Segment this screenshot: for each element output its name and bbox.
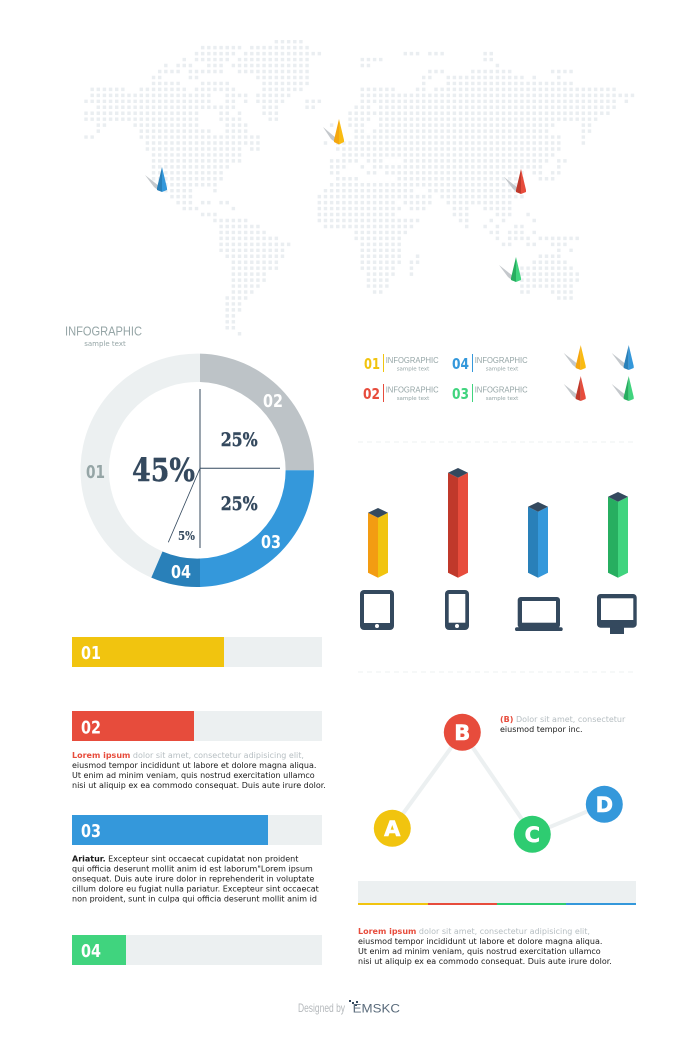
connecting lines — [392, 732, 604, 834]
3D bar: yellow — [368, 508, 388, 578]
legend item 04: sample text — [486, 367, 519, 373]
node A — [374, 810, 411, 847]
segment numbers: 01 — [86, 462, 105, 483]
legend item 04: INFOGRAPHIC — [475, 355, 528, 365]
donut heading — [65, 324, 142, 348]
icon: tablet — [360, 590, 394, 630]
legend item 01: 01 — [364, 355, 380, 373]
3D bar: blue — [528, 502, 548, 578]
percent labels — [132, 429, 258, 543]
dividing lines — [168, 389, 280, 548]
network diagram — [374, 714, 623, 853]
legend item 02: sample text — [397, 396, 430, 402]
legend item 01: INFOGRAPHIC — [386, 355, 439, 365]
legend item 04 — [452, 354, 528, 373]
segment numbers: 03 — [261, 532, 281, 553]
text block: ariatur: Excepteur sint occaecat cupidatat non proident — [106, 855, 298, 864]
map pin: red — [504, 169, 526, 194]
node C: C — [525, 823, 540, 847]
segment 01 — [80, 354, 200, 578]
legend item 02: INFOGRAPHIC — [386, 385, 439, 395]
node D — [586, 786, 623, 823]
text block: lorem ipsum: eiusmod tempor incididunt ut labore et dolore magna aliqua. — [72, 761, 316, 770]
3D bar: green — [608, 492, 628, 578]
text block: ariatur: non proident, sunt in culpa qui officia deserunt mollit anim id — [72, 895, 317, 904]
legend item 03: sample text — [486, 396, 519, 402]
footer credit — [298, 1000, 400, 1016]
text block: lorem ipsum: nisi ut aliquip ex ea commodo consequat. Duis aute irure dolor. — [72, 781, 326, 790]
percent labels: 5% — [178, 529, 196, 543]
progress bar 01: 01 — [81, 643, 101, 664]
node B — [444, 714, 481, 751]
segment 03 — [200, 470, 314, 587]
callout: B: (B) — [500, 715, 513, 724]
text block: ariatur: onsequat. Duis aute irure dolor in reprehenderit in voluptate — [72, 875, 314, 884]
segment numbers — [86, 391, 283, 583]
text block: ariatur: Ariatur. — [72, 855, 106, 864]
footer credit: Designed by — [298, 1001, 345, 1015]
legend item 02: 02 — [363, 385, 380, 403]
progress bar 03 — [72, 815, 322, 845]
legend item 03: INFOGRAPHIC — [475, 385, 528, 395]
icon: phone — [445, 590, 469, 630]
progress bar 04: 04 — [81, 941, 101, 962]
segment numbers: 04 — [171, 562, 191, 583]
legend pin: yellow — [564, 345, 586, 370]
text block: lorem ipsum bottom: nisi ut aliquip ex ea commodo consequat. Duis aute irure dolor. — [358, 957, 612, 966]
progress bar 02 — [72, 711, 322, 741]
text block: lorem ipsum: Ut enim ad minim veniam, quis nostrud exercitation ullamco — [72, 771, 315, 780]
text block: lorem ipsum: dolor sit amet, consectetur adipisicing elit, — [130, 751, 304, 760]
progress bar 01 — [72, 637, 322, 667]
map pin: blue — [145, 167, 167, 192]
progress bar 03: 03 — [81, 821, 101, 842]
icon: laptop — [515, 597, 563, 631]
progress bar 04 — [72, 935, 322, 965]
footer credit: EMSKC — [353, 1002, 400, 1016]
node B: B — [454, 721, 470, 745]
legend pin: blue — [612, 345, 634, 370]
callout: B: Dolor sit amet, consectetur — [513, 715, 626, 724]
callout: B: eiusmod tempor inc. — [500, 725, 583, 734]
legend pin: green — [612, 376, 634, 401]
progress bar 02: 02 — [81, 717, 101, 738]
text block: ariatur: cillum dolore eu fugiat nulla pariatur. Excepteur sint occaecat — [72, 885, 319, 894]
text block: ariatur: qui officia deserunt mollit anim id est laborum"Lorem ipsum — [72, 865, 313, 874]
text block: lorem ipsum: Lorem ipsum — [72, 751, 130, 760]
percent labels: 25% — [221, 493, 258, 515]
node A: A — [384, 817, 401, 841]
legend — [363, 354, 528, 403]
legend item 01 — [364, 354, 439, 373]
legend item 03: 03 — [452, 385, 469, 403]
map pin: green — [499, 257, 521, 282]
percent labels: 45% — [132, 451, 195, 489]
icon: monitor — [597, 594, 637, 634]
node D: D — [596, 793, 613, 817]
text block: lorem ipsum bottom: dolor sit amet, consectetur adipisicing elit, — [416, 927, 590, 936]
world dot map — [84, 42, 637, 334]
donut heading: INFOGRAPHIC — [65, 324, 142, 338]
text block: lorem ipsum bottom: Ut enim ad minim veniam, quis nostrud exercitation ullamco — [358, 947, 601, 956]
donut heading: sample text — [84, 340, 126, 348]
stacked colour bar — [358, 881, 636, 905]
legend pin: red — [564, 376, 586, 401]
logo dots — [349, 1000, 358, 1006]
text block: lorem ipsum bottom: Lorem ipsum — [358, 927, 416, 936]
segment 04 — [151, 552, 200, 587]
node C — [514, 816, 551, 853]
donut chart — [80, 354, 314, 587]
text block: lorem ipsum bottom: eiusmod tempor incididunt ut labore et dolore magna aliqua. — [358, 937, 602, 946]
percent labels: 25% — [221, 429, 258, 451]
legend item 02 — [363, 384, 439, 403]
segment numbers: 02 — [263, 391, 283, 412]
segment 02 — [200, 354, 314, 470]
legend item 04: 04 — [452, 355, 469, 373]
legend item 03 — [452, 384, 528, 403]
map pin: yellow — [323, 119, 344, 144]
legend item 01: sample text — [397, 367, 430, 373]
3D bar: red — [448, 468, 468, 578]
